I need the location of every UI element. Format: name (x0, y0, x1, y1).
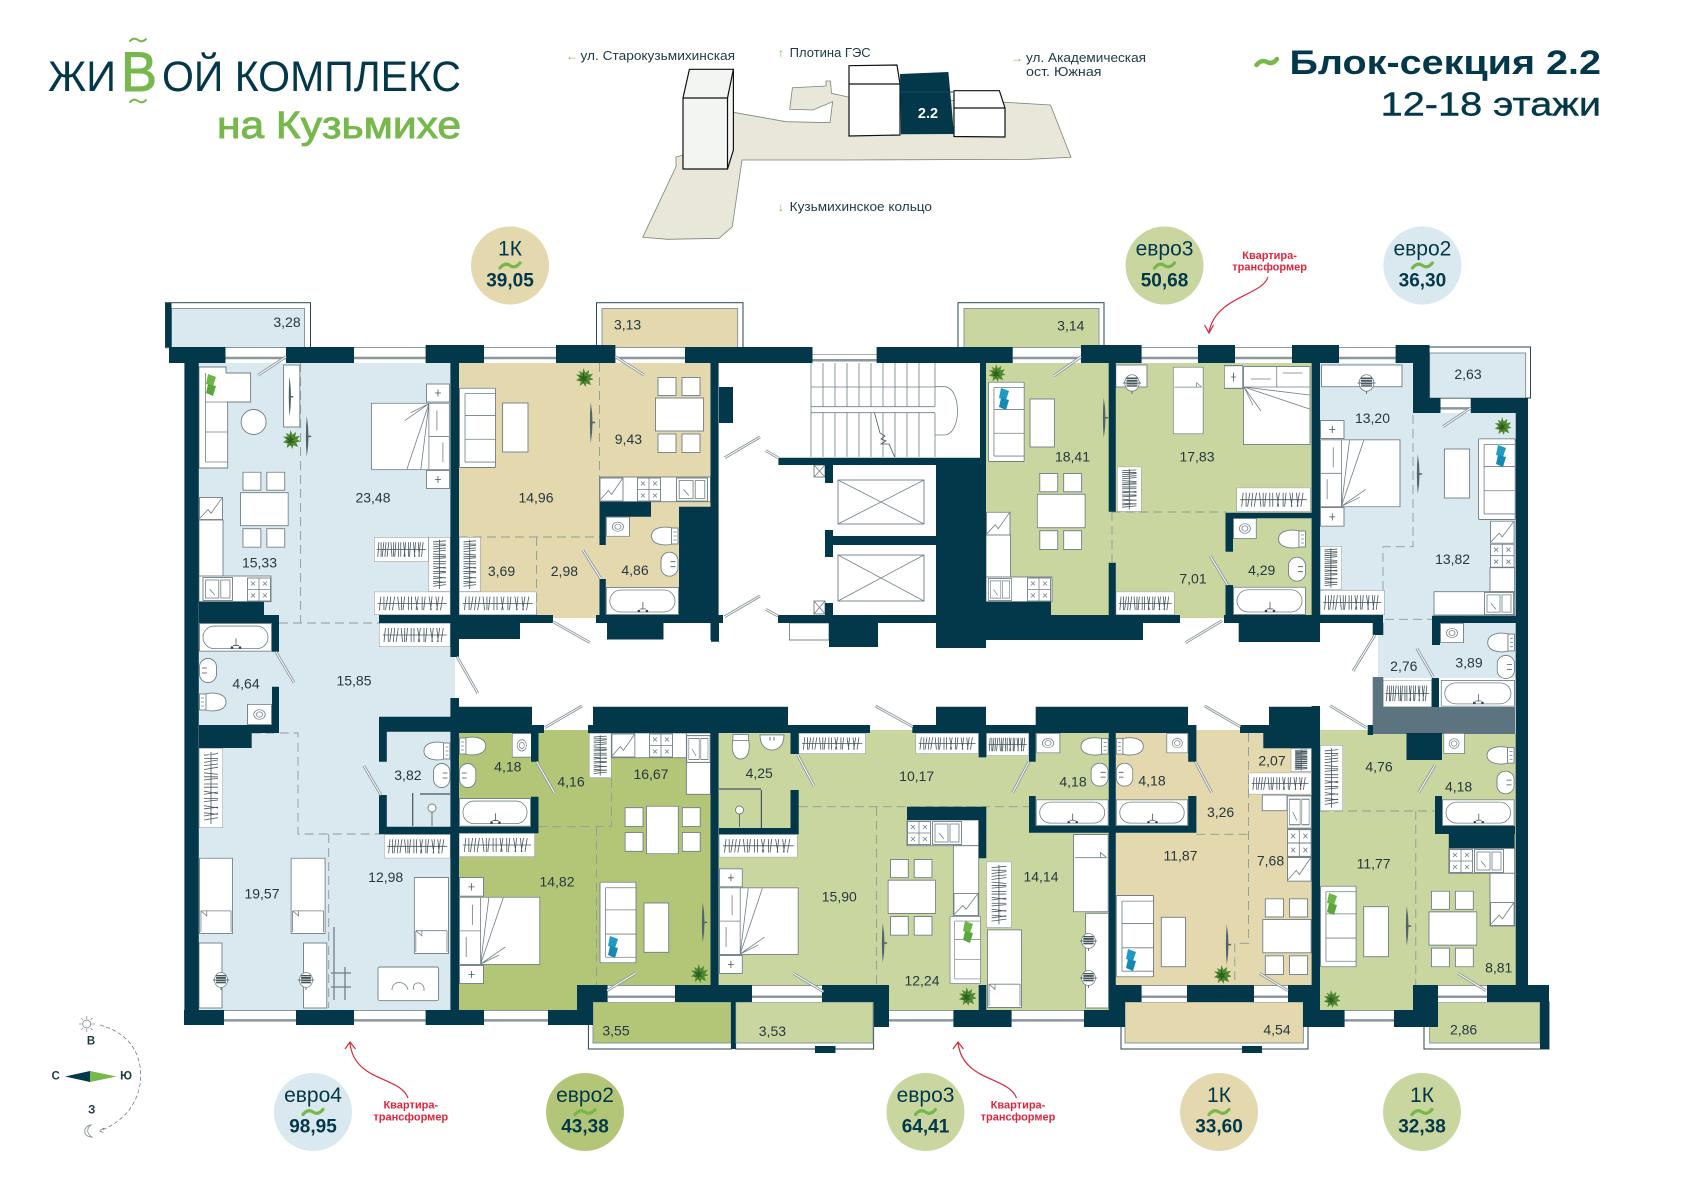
room labels: 11,77 (1357, 855, 1391, 871)
balcony 3,14 (958, 303, 1104, 348)
bathroom 4,18 (1116, 733, 1188, 826)
badge: 1К 33,60 (1180, 1073, 1258, 1151)
compass (52, 1016, 141, 1137)
apartment: евро2 36,30 (1320, 347, 1530, 734)
badge: 1К 32,38 (1383, 1073, 1461, 1151)
callout: Квартира-трансформер right: трансформер (981, 1112, 1056, 1124)
elevator 2 (834, 545, 936, 615)
callout: Квартира-трансформер top: Квартира- (1242, 250, 1297, 262)
bathroom 3,89 (1383, 623, 1514, 707)
street label: Старокузьмихинская: ул. Старокузьмихинская (580, 49, 735, 63)
room labels: 4,18 (494, 759, 522, 775)
balcony 4,54 (1121, 1002, 1308, 1049)
living furniture (1116, 896, 1311, 984)
apartment: евро4 98,95 (166, 303, 455, 1010)
room labels: 11,87 (1164, 847, 1198, 863)
room labels: 19,57 (244, 885, 280, 901)
room labels: 3,28 (273, 314, 301, 330)
kitchen and living (882, 733, 1029, 1006)
room labels: 15,85 (336, 673, 372, 689)
callout: Квартира-трансформер top: трансформер (1232, 261, 1307, 273)
bathroom 4,18 (1036, 733, 1108, 826)
bathroom 4,29 (1233, 518, 1306, 614)
walls (166, 303, 1549, 1053)
building: section 2.2: 2.2 (918, 106, 938, 122)
room labels: 3,69 (488, 563, 515, 579)
icon: moon (85, 1125, 92, 1137)
room labels: 8,81 (1485, 959, 1513, 975)
apartment: 1К 39,05 (459, 303, 743, 618)
room labels: 3,82 (394, 767, 422, 783)
direction label: Кузьмихинское кольцо: Кузьмихинское кольцо (790, 200, 932, 214)
kitchen and dining (589, 733, 710, 854)
room labels: 4,18 (1138, 772, 1166, 788)
room labels: 15,90 (822, 889, 857, 905)
apartment: евро3 50,68 (958, 303, 1312, 618)
room labels: 2,63 (1454, 366, 1482, 382)
street label: Академическая: → (1011, 51, 1023, 65)
badge: евро3 50,68: евро3 (1136, 238, 1193, 260)
room labels: 2,98 (551, 563, 578, 579)
room labels: 13,82 (1435, 551, 1470, 567)
room labels (746, 765, 1087, 1039)
doors (258, 357, 1486, 992)
badge: евро3 50,68: 50,68 (1141, 270, 1188, 292)
room labels: 4,86 (621, 562, 649, 578)
room labels: 7,68 (1257, 853, 1284, 869)
direction label: Плотина ГЭС: ↑ (778, 46, 784, 60)
callout: Квартира-трансформер top (1204, 250, 1307, 333)
room labels (1355, 366, 1483, 674)
room labels: 15,33 (242, 555, 277, 571)
badge: евро3 50,68 (1126, 226, 1204, 304)
badge: 1К 32,38: 32,38 (1398, 1116, 1446, 1138)
callout: Квартира-трансформер left (345, 1042, 448, 1124)
balcony 2,86 (1424, 1002, 1549, 1049)
room labels: 17,83 (1179, 448, 1215, 464)
living and kitchen furniture (1320, 745, 1515, 1008)
living furniture (1417, 417, 1515, 615)
badge: евро2 36,30: 36,30 (1399, 270, 1446, 292)
room labels: 13,20 (1355, 410, 1390, 426)
balcony 3,55 (588, 1002, 731, 1049)
living furniture (460, 368, 710, 502)
bathroom 4,25 (719, 733, 866, 857)
room labels (494, 759, 669, 1039)
bedroom furniture (371, 384, 450, 647)
badge: евро2 36,30 (1383, 226, 1461, 304)
room labels: 2,86 (1450, 1022, 1477, 1038)
room labels: 9,43 (615, 431, 642, 447)
street label: Академическая (1011, 51, 1146, 79)
kitchen and storage (1248, 748, 1312, 881)
logo: ЖИВОЙ КОМПЛЕКС на Кузьмихе: ОЙ КОМПЛЕКС (162, 52, 461, 101)
heading: Блок-секция 2.2 (1256, 44, 1601, 122)
apartment: 1К 32,38 (1320, 730, 1549, 1049)
room labels (232, 314, 422, 901)
service block (1373, 677, 1515, 734)
callout: Квартира-трансформер left: Квартира- (383, 1100, 438, 1112)
badge: 1К 39,05 (471, 226, 549, 304)
direction label: Кузьмихинское кольцо: ↓ (778, 200, 784, 214)
apartment: евро2 43,38 (459, 730, 731, 1049)
street label: Академическая: ул. Академическая (1026, 51, 1146, 65)
icon: sun (79, 1016, 94, 1032)
balcony 3,53 (736, 1002, 874, 1049)
room labels (1357, 758, 1513, 1038)
room labels (488, 317, 649, 579)
room labels: 3,13 (614, 317, 641, 333)
living room furniture (199, 365, 311, 602)
room labels: 2,76 (1390, 658, 1418, 674)
badge: евро3 64,41 (886, 1073, 964, 1151)
room labels: 14,14 (1023, 869, 1059, 885)
bathroom 4,18 (459, 734, 531, 826)
bathroom 4,64 (200, 624, 272, 725)
room labels: 4,54 (1263, 1022, 1291, 1038)
compass: З (88, 1105, 95, 1117)
logo: ЖИВОЙ КОМПЛЕКС на Кузьмихе: на Кузьмихе (217, 105, 461, 147)
shafts (789, 465, 829, 640)
callout: Квартира-трансформер left: трансформер (373, 1112, 448, 1124)
building: section A (849, 65, 900, 136)
badge: евро4 98,95: евро4 (284, 1084, 342, 1107)
badge: евро2 36,30: евро2 (1393, 238, 1451, 260)
room labels: 3,14 (1057, 317, 1085, 333)
bathroom 4,18 (1442, 733, 1514, 826)
needle (65, 1071, 117, 1082)
apartment: 1К 33,60 (1116, 730, 1312, 1049)
bathroom 4,86 (606, 517, 678, 614)
room labels (1055, 317, 1276, 587)
callout: Квартира-трансформер right: Квартира- (991, 1100, 1046, 1112)
badge: 1К 39,05: 39,05 (486, 270, 534, 292)
site plan (566, 46, 1146, 239)
room labels: 4,76 (1365, 758, 1393, 774)
building: section C (954, 91, 1005, 137)
badge: евро4 98,95: 98,95 (289, 1116, 337, 1138)
logo: ЖИВОЙ КОМПЛЕКС на Кузьмихе: В (121, 40, 157, 103)
badge: евро3 64,41: евро3 (897, 1084, 954, 1107)
room labels: 3,89 (1455, 655, 1483, 671)
room labels: 18,41 (1055, 448, 1090, 464)
badge: евро4 98,95 (274, 1073, 352, 1151)
room labels: 12,24 (904, 973, 940, 989)
room labels: 12,98 (368, 869, 403, 885)
bedroom furniture (1320, 365, 1402, 615)
compass: Ю (120, 1070, 132, 1082)
heading: Блок-секция 2.2: Блок-секция 2.2 (1290, 44, 1601, 82)
badge: 1К 39,05: 1К (498, 238, 523, 260)
bedroom furniture (1116, 365, 1310, 615)
building: west tower (683, 69, 733, 169)
bathroom 3,82 (413, 742, 450, 826)
direction label: Плотина ГЭС: Плотина ГЭС (790, 46, 871, 60)
windows (224, 347, 1487, 1025)
room labels: 23,48 (355, 490, 391, 506)
room labels: 4,16 (557, 774, 585, 790)
room labels: 4,18 (1059, 774, 1087, 790)
balcony 3,13 (596, 303, 743, 348)
room labels: 10,17 (899, 768, 934, 784)
building: section 2.2 (900, 72, 954, 134)
sun path arrow (99, 1025, 141, 1132)
stairs (811, 363, 980, 457)
living furniture (986, 364, 1108, 602)
badge: 1К 33,60: 1К (1207, 1084, 1232, 1107)
badge: евро2 43,38 (546, 1073, 624, 1151)
logo: ЖИВОЙ КОМПЛЕКС на Кузьмихе: ЖИ (48, 53, 116, 101)
second bedroom furniture (986, 835, 1109, 1008)
room labels (1138, 753, 1291, 1038)
children's room furniture (199, 748, 450, 1008)
room labels: 3,55 (602, 1023, 630, 1039)
room labels: 4,64 (232, 675, 260, 691)
room labels: 4,25 (746, 765, 773, 781)
callout: Квартира-трансформер right (953, 1042, 1056, 1124)
room labels: 3,26 (1207, 804, 1234, 820)
room labels: 3,53 (759, 1023, 786, 1039)
compass: В (87, 1036, 95, 1048)
apartment: евро3 64,41 (719, 730, 1109, 1049)
balcony 2,63 (1424, 347, 1530, 398)
heading: Блок-секция 2.2: 12-18 этажи (1381, 86, 1601, 122)
badge: евро2 43,38: 43,38 (561, 1116, 609, 1138)
bedroom furniture (719, 869, 798, 974)
room labels: 4,29 (1248, 562, 1276, 578)
elevator 1 (834, 465, 936, 536)
room labels: 2,07 (1258, 753, 1286, 769)
room labels: 14,82 (539, 873, 575, 889)
core: stairs and elevators (789, 363, 980, 640)
street label: Академическая: ост. Южная (1026, 65, 1102, 79)
room labels: 14,96 (518, 489, 554, 505)
badge: евро3 64,41: 64,41 (902, 1116, 950, 1138)
bedroom and living furniture (459, 833, 709, 984)
badge: 1К 33,60: 33,60 (1195, 1116, 1243, 1138)
compass: С (52, 1070, 60, 1082)
room labels: 4,18 (1445, 779, 1472, 795)
balcony 3,28 (166, 303, 310, 348)
street label: Старокузьмихинская: ← (566, 49, 578, 63)
site ground (643, 81, 1071, 239)
wardrobes (459, 537, 537, 615)
logo: ЖИВОЙ КОМПЛЕКС на Кузьмихе (48, 39, 461, 147)
room labels: 7,01 (1179, 571, 1207, 587)
badge: евро2 43,38: евро2 (556, 1084, 614, 1107)
room labels: 16,67 (633, 766, 669, 782)
badge: 1К 32,38: 1К (1410, 1084, 1435, 1107)
